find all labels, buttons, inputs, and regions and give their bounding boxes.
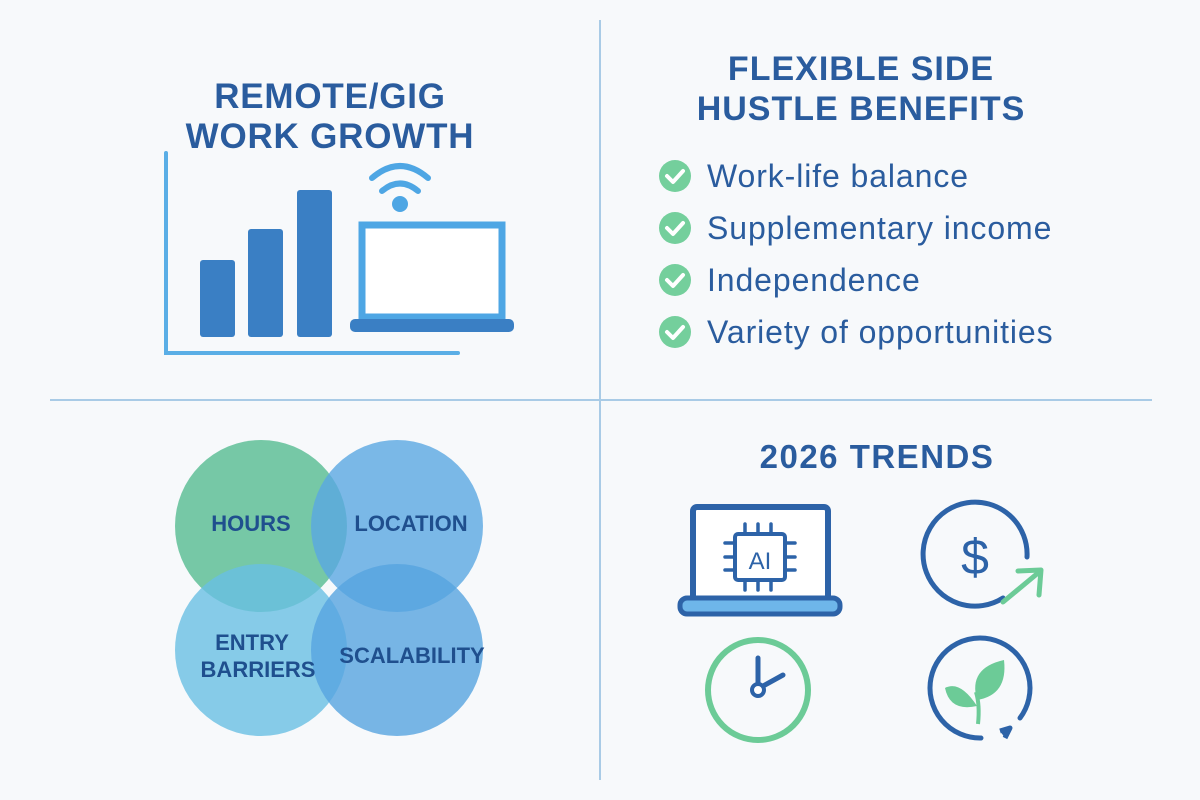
icon: plant cycle: [930, 638, 1030, 738]
title: remote gig work growth: REMOTE/GIG: [214, 77, 446, 116]
icon: AI laptop: [680, 507, 840, 614]
title: remote gig work growth: [186, 77, 474, 156]
icon: dollar growth: [923, 502, 1041, 606]
title: flexible side hustle benefits: HUSTLE BENEFITS: [697, 90, 1025, 128]
list: benefits: Work-life balance: [707, 158, 969, 194]
icon: wifi laptop: [350, 166, 514, 332]
icon: AI laptop: AI: [749, 548, 771, 575]
list: benefits: Independence: [707, 262, 921, 298]
icon: dollar growth: $: [961, 529, 989, 585]
venn diagram: flexibility factors: HOURS: [211, 511, 291, 536]
icon: clock: [708, 640, 808, 740]
title: 2026 trends: 2026 TRENDS: [760, 438, 994, 475]
venn diagram: flexibility factors: LOCATION: [354, 511, 468, 536]
title: flexible side hustle benefits: FLEXIBLE SIDE: [728, 50, 994, 88]
list: benefits: Supplementary income: [707, 210, 1052, 246]
venn diagram: flexibility factors: SCALABILITY: [339, 643, 485, 668]
chart: bar growth with laptop: [166, 153, 514, 353]
title: remote gig work growth: WORK GROWTH: [186, 117, 474, 156]
list: benefits: [659, 158, 1054, 350]
title: flexible side hustle benefits: [697, 50, 1025, 128]
venn diagram: flexibility factors: ENTRY: [215, 630, 289, 655]
list: benefits: Variety of opportunities: [707, 314, 1054, 350]
venn diagram: flexibility factors: BARRIERS: [201, 657, 315, 682]
venn diagram: flexibility factors: [175, 440, 485, 736]
